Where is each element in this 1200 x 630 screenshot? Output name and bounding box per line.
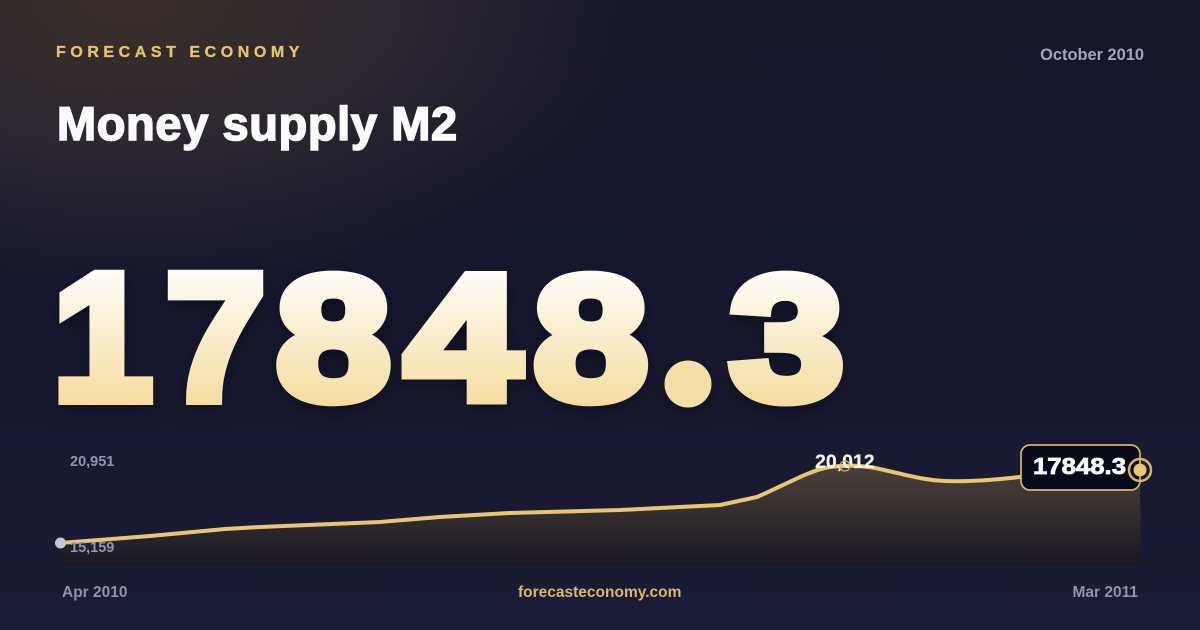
peak label: 20,012 [815,451,875,473]
big number: . [676,333,699,411]
start dot [55,538,66,548]
start date: Apr 2010 [62,584,127,601]
brand label: FORECAST ECONOMY [56,44,304,61]
value callout: 17848.3 [1033,453,1126,479]
big number: 8 [276,240,391,437]
sparkline chart [55,445,1151,565]
title: Money supply M2 [57,97,458,150]
date label: October 2010 [1040,46,1144,64]
area fill [60,466,1141,565]
line [60,466,1140,543]
big number: 3 [729,240,844,437]
end date: Mar 2011 [1072,584,1138,601]
y max label: 20,951 [70,454,114,470]
y min label: 15,159 [70,540,114,556]
big number [52,235,844,439]
site url: forecasteconomy.com [518,584,681,601]
end marker [1129,459,1151,481]
big number: 1 [52,235,153,439]
big number: 4 [405,239,521,438]
value callout [1021,445,1140,490]
big number: 7 [165,235,266,439]
peak marker [840,461,850,471]
big number: 8 [534,240,648,437]
